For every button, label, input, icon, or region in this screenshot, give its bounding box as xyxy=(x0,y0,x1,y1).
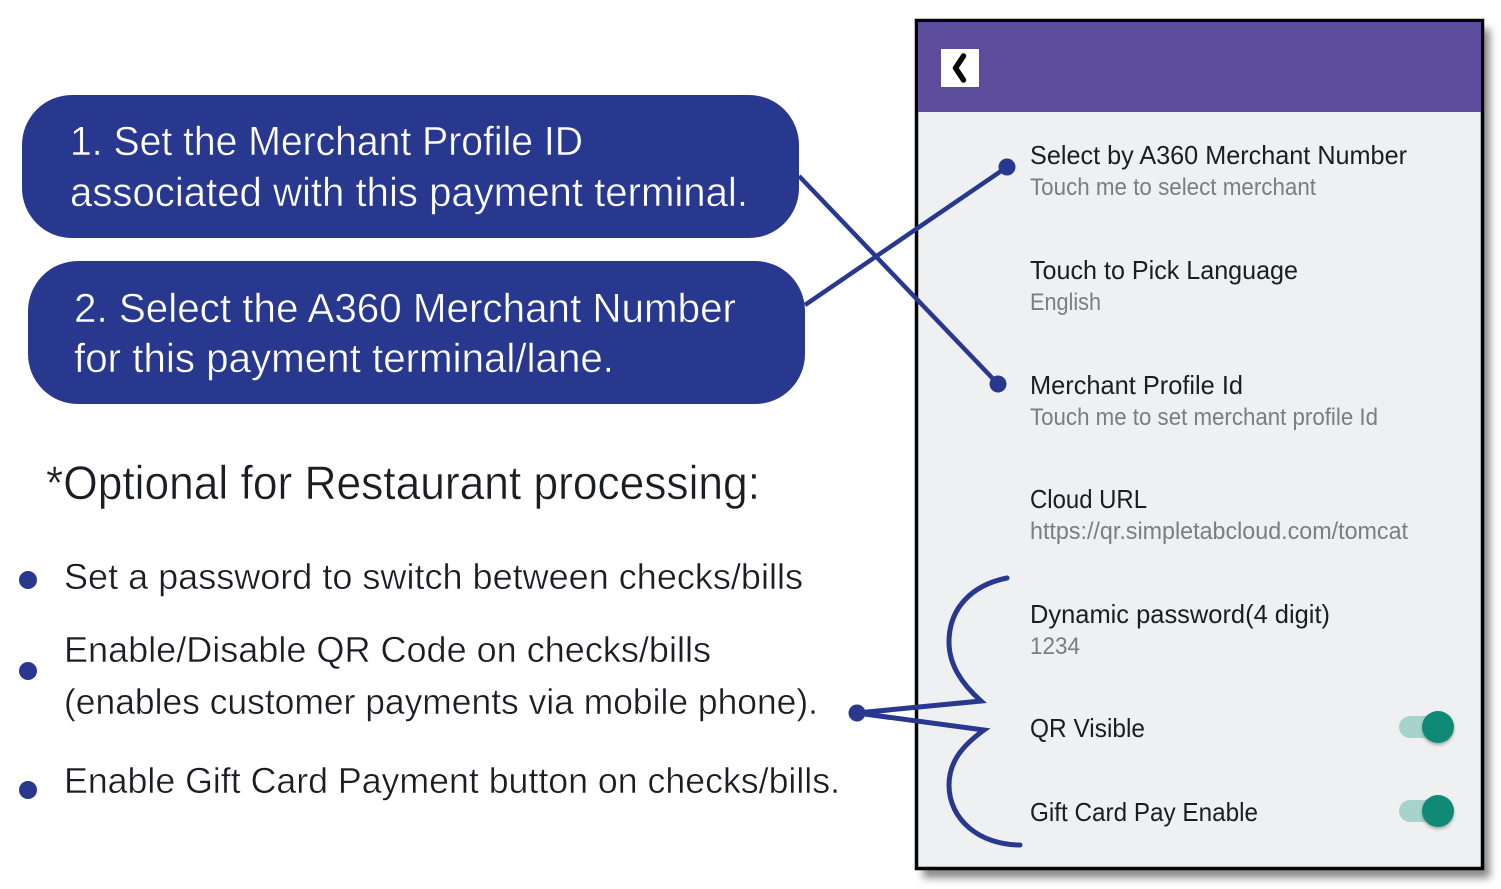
arrow: callout 2 to merchant number xyxy=(805,158,1016,305)
callout 2: merchant number: for this payment terminal/lane. xyxy=(74,335,614,381)
arrow: callout 1 to merchant profile id xyxy=(799,176,1006,392)
setting: merchant profile id: Merchant Profile Id xyxy=(1030,370,1243,400)
setting: gift card pay: Gift Card Pay Enable xyxy=(1030,797,1258,827)
heading: optional for restaurant processing: *Optional for Restaurant processing: xyxy=(46,456,760,509)
bracket: restaurant settings pointer xyxy=(848,578,1020,845)
callout 1: merchant profile id: 1. Set the Merchant Profile ID xyxy=(70,118,583,164)
app header bar xyxy=(918,22,1481,112)
callout 1: merchant profile id xyxy=(22,95,799,238)
toggle: qr visible xyxy=(1399,711,1454,745)
setting: cloud url: Cloud URL xyxy=(1030,484,1147,514)
bullet 1: Set a password to switch between checks/bills xyxy=(64,556,803,597)
toggle: gift card pay xyxy=(1399,795,1454,829)
callout 2: merchant number: 2. Select the A360 Merchant Number xyxy=(74,285,736,331)
bullet list: restaurant options xyxy=(19,556,840,801)
bullet 3: Enable Gift Card Payment button on checks/bills. xyxy=(64,760,840,801)
bullet 2: (enables customer payments via mobile phone). xyxy=(64,681,818,722)
setting: qr visible xyxy=(1030,711,1454,745)
bullet 2 xyxy=(19,629,818,722)
setting: qr visible: QR Visible xyxy=(1030,713,1145,743)
setting: dynamic password: 1234 xyxy=(1030,633,1080,660)
bullet 2: Enable/Disable QR Code on checks/bills xyxy=(64,629,711,670)
setting: merchant profile id xyxy=(1030,370,1378,431)
setting: select merchant number: Touch me to select merchant xyxy=(1030,174,1316,201)
panel: app settings screen xyxy=(916,20,1490,878)
icon: back button xyxy=(941,49,979,87)
setting: cloud url: https://qr.simpletabcloud.com/tomcat xyxy=(1030,518,1408,545)
setting: select merchant number: Select by A360 Merchant Number xyxy=(1030,140,1407,170)
setting: select merchant number xyxy=(1030,140,1407,201)
setting: cloud url xyxy=(1030,484,1408,545)
setting: gift card pay xyxy=(1030,795,1454,829)
setting: language xyxy=(1030,255,1298,316)
setting: dynamic password: Dynamic password(4 digit) xyxy=(1030,599,1330,629)
callout 2: merchant number xyxy=(28,261,805,404)
setting: dynamic password xyxy=(1030,599,1330,660)
setting: merchant profile id: Touch me to set merchant profile Id xyxy=(1030,404,1378,431)
setting: language: Touch to Pick Language xyxy=(1030,255,1298,285)
callout 1: merchant profile id: associated with this payment terminal. xyxy=(70,169,748,215)
setting: language: English xyxy=(1030,289,1101,316)
